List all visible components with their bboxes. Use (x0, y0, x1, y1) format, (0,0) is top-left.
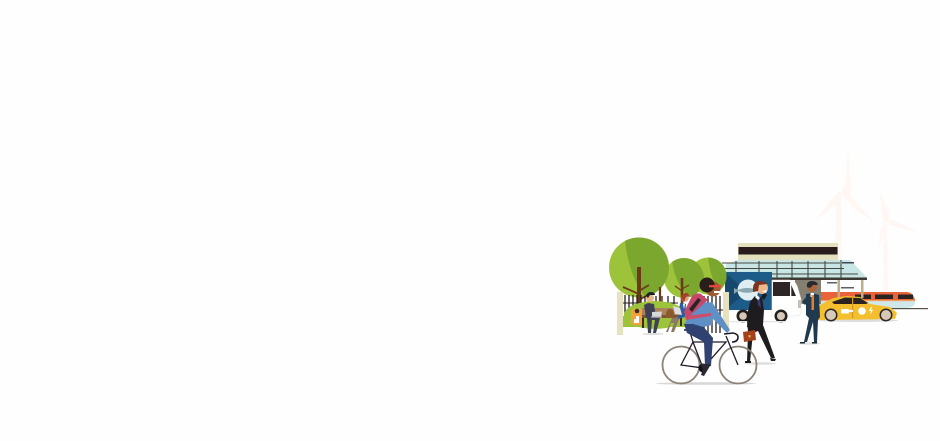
person: man with laptop on bench (642, 292, 664, 335)
head (706, 282, 720, 296)
person: man on phone with briefcase (743, 281, 776, 365)
person: cyclist with backpack on bicycle (656, 278, 756, 385)
park fence, left (623, 295, 678, 327)
train (820, 292, 928, 309)
legs (684, 321, 713, 366)
yellow electric taxi (818, 296, 898, 322)
icon: wind turbines (815, 150, 919, 290)
bicycle (662, 330, 756, 384)
park fence, right and pillars (617, 292, 729, 335)
sign (738, 243, 838, 260)
city illustration (609, 154, 928, 385)
person: man in navy suit with orange tie (798, 281, 820, 345)
person: woman with laptop on bench (666, 293, 689, 332)
backpack (684, 293, 708, 319)
canopy glass (726, 260, 867, 278)
orange bin (631, 309, 643, 325)
gas station building (722, 243, 867, 304)
delivery truck (725, 272, 801, 322)
park bush (623, 301, 687, 329)
park bench (642, 308, 683, 328)
torso (685, 302, 713, 327)
trees (609, 238, 726, 304)
